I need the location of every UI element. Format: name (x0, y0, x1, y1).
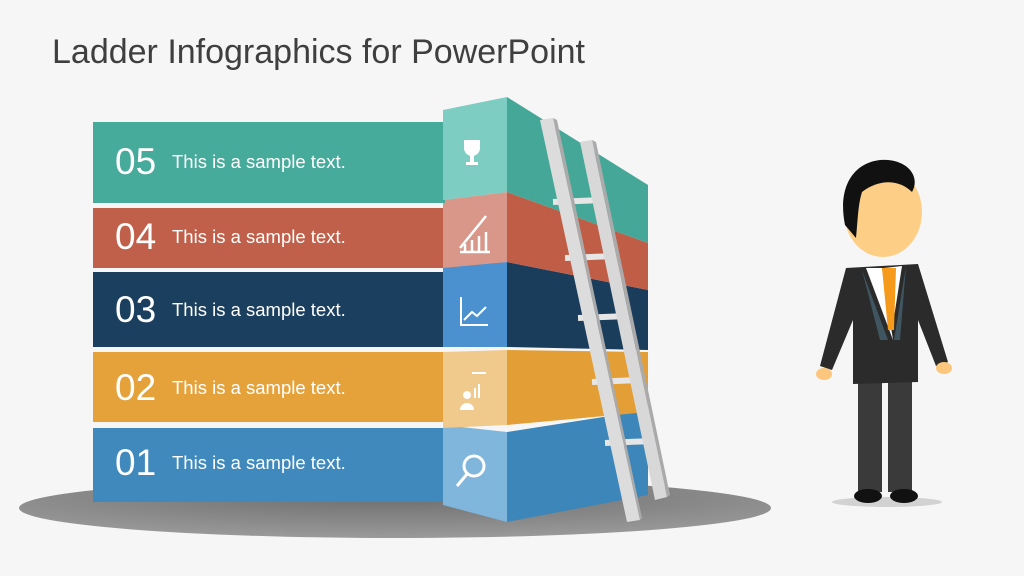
label 01 (115, 442, 346, 483)
icon: growth chart (460, 216, 490, 252)
label 02 (115, 367, 346, 408)
icon: presenter (460, 372, 486, 410)
label 05: This is a sample text. (172, 151, 346, 172)
label 03 (115, 289, 346, 330)
step 02 (93, 350, 648, 428)
businessman (816, 160, 952, 507)
label 01: 01 (115, 442, 156, 483)
title: Ladder Infographics for PowerPoint (52, 33, 585, 71)
label 04 (115, 216, 346, 257)
label 01: This is a sample text. (172, 452, 346, 473)
label 04: 04 (115, 216, 156, 257)
ladder (540, 118, 670, 522)
label 05 (115, 141, 346, 182)
icon: trophy (464, 140, 480, 165)
step 01 (93, 410, 648, 522)
label 03: This is a sample text. (172, 299, 346, 320)
label 05: 05 (115, 141, 156, 182)
label 02: 02 (115, 367, 156, 408)
label 04: This is a sample text. (172, 226, 346, 247)
step 05 (93, 97, 648, 243)
icon: line chart (461, 297, 488, 325)
icon: magnifier (457, 456, 484, 486)
step 03 (93, 262, 648, 350)
floor shadow (19, 478, 771, 538)
label 02: This is a sample text. (172, 377, 346, 398)
step 04 (93, 192, 648, 290)
label 03: 03 (115, 289, 156, 330)
